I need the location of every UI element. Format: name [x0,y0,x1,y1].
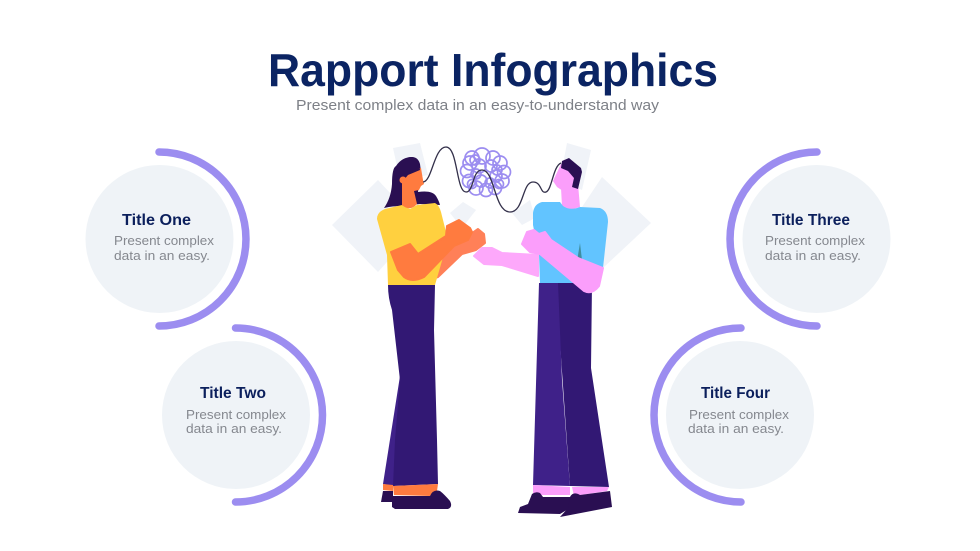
panel: title one: Present complex [114,234,215,248]
subtitle: Present complex data in an easy-to-understand way [296,97,660,114]
panel: title four: Title Four [701,385,770,402]
title: Rapport Infographics [268,44,718,96]
panel: title four: data in an easy. [688,422,784,436]
man shirt fold [577,243,582,261]
illustration: man [474,158,612,517]
man front arm [522,230,603,292]
man pink cuffs [533,485,570,495]
panel: title two [162,328,322,502]
man hair [561,158,582,189]
panel: title two: Present complex [186,408,287,422]
woman hair back [384,157,440,208]
man neck [561,184,580,210]
woman neck and face [402,168,424,208]
man back arm [474,248,538,276]
panel: title two: data in an easy. [186,422,282,436]
woman shoes [381,491,393,502]
illustration: tangled scribble [460,148,510,196]
man shoes [518,492,570,514]
woman pants [388,285,438,486]
man pants [539,283,609,487]
illustration: woman [377,157,485,509]
panel: title three: Title Three [772,212,850,229]
panel: title one [86,152,246,326]
man shirt [533,202,608,283]
woman front arm [391,220,472,280]
panel: title one: data in an easy. [114,249,210,263]
panel: title four: Present complex [689,408,790,422]
panel: title three: data in an easy. [765,249,861,263]
panel: title four [654,328,814,502]
panel: title three: Present complex [765,234,866,248]
man face [553,164,577,191]
woman hair front [396,157,420,186]
panel: title three [730,152,890,326]
woman ear [400,176,406,184]
panel: title two: Title Two [200,385,266,402]
illustration: background diamonds [332,143,651,272]
woman back arm [435,229,485,278]
illustration: connecting wire [423,147,561,212]
man light pant leg [533,283,570,486]
woman back leg [383,376,404,486]
woman shirt [377,203,448,285]
panel: title one: Title One [122,212,191,229]
woman orange cuffs [383,484,393,491]
